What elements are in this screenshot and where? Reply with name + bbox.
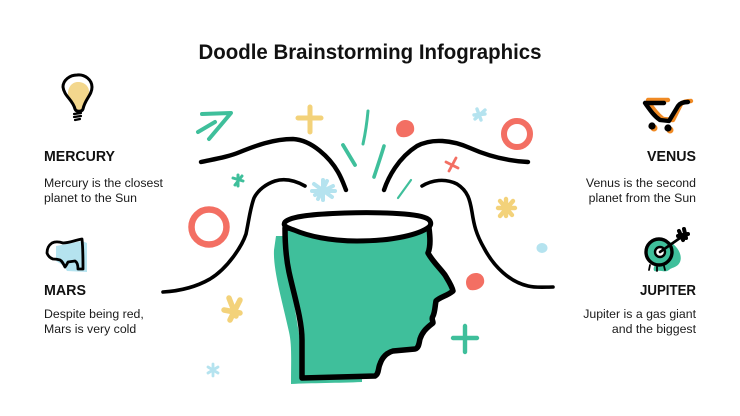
doodle: yellow plus [298, 107, 321, 132]
panel: venus [586, 100, 696, 205]
panel: jupiter [583, 229, 697, 336]
doodle: green star left [233, 175, 243, 186]
swirl: lower right [422, 180, 553, 287]
doodle: green dash right [374, 146, 384, 177]
heading: venus: VENUS [647, 149, 696, 165]
doodle: green plus lower [453, 326, 477, 352]
heading: mars: MARS [44, 283, 86, 299]
doodle: green dash left [343, 145, 355, 165]
doodle: green thin dash [398, 180, 411, 198]
doodle: blue star left [312, 180, 335, 200]
doodle: yellow star lower [224, 298, 240, 320]
text: venus description: Venus is the second [586, 176, 696, 190]
doodle: red dot [396, 120, 414, 137]
text: mars description: Mars is very cold [44, 322, 136, 336]
heading: mercury: MERCURY [44, 149, 115, 165]
doodle: red cross [446, 158, 458, 171]
text: venus description: planet from the Sun [589, 191, 696, 205]
open top of head [284, 213, 431, 241]
doodle: red ring [504, 121, 530, 147]
text: jupiter description: and the biggest [612, 322, 697, 336]
icon: shopping cart [645, 100, 691, 134]
swirl: upper left [201, 139, 346, 190]
text: jupiter description: Jupiter is a gas giant [583, 307, 697, 321]
swirl: upper right [384, 141, 528, 190]
central illustration: head [274, 213, 453, 384]
doodle: yellow star right [498, 199, 515, 216]
doodle: green arrow [198, 113, 231, 139]
swirl: lower left [163, 180, 305, 292]
icon: target with arrow [646, 229, 688, 271]
head fill and outline [285, 228, 453, 378]
doodle: red ring left [192, 210, 226, 244]
icon: light bulb [63, 75, 92, 120]
doodle: red dot lower [466, 273, 484, 290]
panel: mercury [44, 75, 163, 205]
heading: jupiter: JUPITER [640, 283, 696, 299]
text: mercury description: planet to the Sun [44, 191, 137, 205]
doodle: green dashes [363, 111, 368, 144]
panel: mars [44, 239, 144, 336]
green shadow of head [274, 236, 362, 384]
doodle: blue dot [536, 243, 548, 253]
title: Doodle Brainstorming Infographics [198, 40, 542, 64]
text: mars description: Despite being red, [44, 307, 144, 321]
icon: mars map [47, 239, 87, 272]
doodle: blue star top [474, 109, 485, 120]
doodle: blue star lower [208, 364, 218, 376]
text: mercury description: Mercury is the closest [44, 176, 163, 190]
